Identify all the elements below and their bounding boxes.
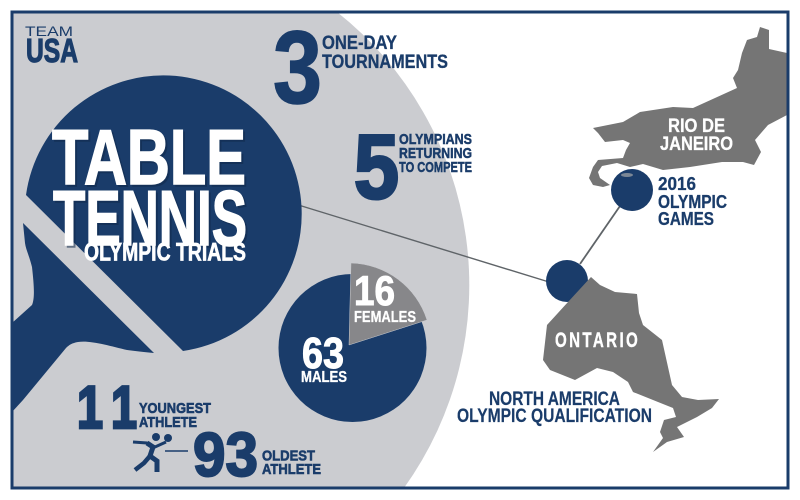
logo: Team USA: USA: [26, 32, 78, 69]
title: table tennis: [52, 113, 247, 262]
pie label: 16 females: [354, 267, 416, 326]
pie slice: males: [278, 274, 426, 422]
map: Ontario: [543, 277, 719, 452]
label: North America Olympic Qualification: NORTH AMERICA: [489, 389, 620, 410]
stat: 3 one-day tournaments: 3: [273, 10, 322, 125]
stat: 5 olympians returning: OLYMPIANS: [399, 131, 472, 148]
label: 2016 Olympic Games: GAMES: [658, 209, 714, 229]
panel: grey circular background: [12, 12, 469, 488]
stat: 93 oldest athlete: 93: [193, 421, 258, 490]
title: table tennis: TABLE: [52, 113, 246, 201]
title shadow: TENNIS: [55, 176, 249, 264]
stat: 3 one-day tournaments: ONE-DAY: [322, 33, 397, 54]
stat: 5 olympians returning: RETURNING: [399, 145, 472, 162]
logo: Team USA: [25, 23, 78, 69]
stat: 93 oldest athlete: [193, 421, 321, 490]
label: North America Olympic Qualification: OLYMPIC QUALIFICATION: [457, 406, 652, 427]
location marker: Ontario: [546, 260, 588, 302]
pie chart: athletes by gender: [278, 263, 427, 422]
stat: 11 youngest athlete: YOUNGEST: [139, 400, 211, 417]
title: table tennis: TENNIS: [53, 174, 247, 262]
stat: 3 one-day tournaments: [273, 10, 448, 125]
title shadow: TABLE: [54, 115, 248, 203]
subtitle: olympic trials: OLYMPIC TRIALS: [84, 238, 246, 266]
stat: 93 oldest athlete: OLDEST: [262, 448, 315, 464]
pie slice: females: [349, 263, 427, 345]
stat: 5 olympians returning: 5: [354, 117, 399, 218]
location marker: Rio: [611, 169, 653, 211]
label: 2016 Olympic Games: OLYMPIC: [658, 192, 727, 212]
label: 2016 Olympic Games: [658, 174, 727, 229]
stat: 11 youngest athlete: ATHLETE: [139, 414, 197, 431]
stat: 11 youngest athlete: 1: [77, 374, 103, 441]
stat: 93 oldest athlete: ATHLETE: [262, 461, 321, 478]
stat: 11 youngest athlete: 1: [111, 374, 137, 441]
label: 2016 Olympic Games: 2016: [658, 174, 696, 194]
title shadow: [54, 115, 249, 264]
icon: table tennis player: [133, 433, 188, 472]
pie label: 63 males: 63: [302, 329, 344, 378]
stat: 5 olympians returning: [354, 117, 472, 218]
connector lines: [300, 206, 620, 282]
map: Rio de Janeiro: [589, 27, 787, 187]
map label: Ontario: ONTARIO: [555, 327, 638, 352]
map label: Rio de Janeiro: JANEIRO: [660, 134, 733, 155]
stat: 11 youngest athlete: [77, 374, 211, 441]
label: North America Olympic Qualification: [457, 389, 652, 427]
title: [52, 113, 249, 266]
pie label: 63 males: MALES: [301, 369, 347, 386]
stat: 5 olympians returning: TO COMPETE: [399, 159, 472, 176]
map label: Rio de Janeiro: RIO DE: [668, 116, 725, 137]
pie label: 16 females: 16: [354, 267, 395, 314]
stat: 3 one-day tournaments: TOURNAMENTS: [322, 52, 448, 73]
icon: table tennis paddle: [12, 75, 302, 412]
map label: Rio de Janeiro: [660, 116, 733, 155]
logo: Team USA: TEAM: [25, 23, 73, 39]
pie label: 16 females: FEMALES: [354, 309, 416, 326]
